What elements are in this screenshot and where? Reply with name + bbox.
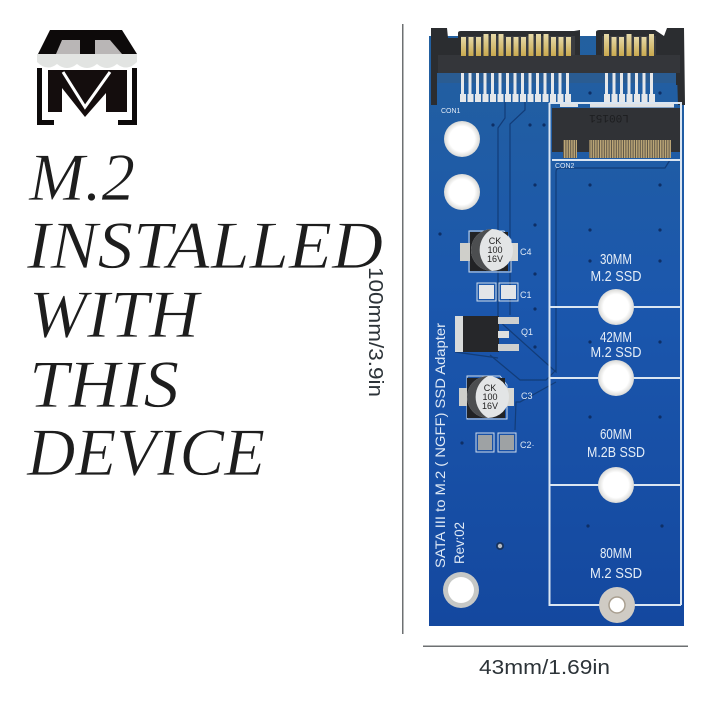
pads C2 xyxy=(476,433,516,452)
traces xyxy=(455,102,670,430)
board body xyxy=(429,36,684,626)
board labels: 80MM xyxy=(600,545,632,562)
title text: WITH xyxy=(29,276,203,352)
capacitor C3 xyxy=(459,376,514,419)
pads C1 xyxy=(477,283,518,301)
capacitor C4: 16V xyxy=(487,254,503,264)
board labels: 30MM xyxy=(600,251,632,268)
capacitor C4 xyxy=(460,229,518,272)
board labels: C2· xyxy=(520,440,535,450)
board labels: Rev:02 xyxy=(451,522,467,564)
board labels: CON2 xyxy=(555,163,575,170)
title text: DEVICE xyxy=(26,414,265,490)
board labels: 42MM xyxy=(600,329,632,346)
board labels: CON1 xyxy=(441,108,461,115)
board labels: M.2 SSD xyxy=(590,344,642,361)
transistor Q1 xyxy=(455,316,519,352)
height dimension line xyxy=(402,24,404,634)
capacitor C3: 16V xyxy=(482,401,498,411)
SATA solder pins xyxy=(460,73,655,102)
title text: M.2 xyxy=(28,139,135,215)
board labels: M.2B SSD xyxy=(587,444,645,461)
width dimension line xyxy=(423,646,688,647)
circuit board xyxy=(429,28,685,626)
width dimension label: 43mm/1.69in xyxy=(479,657,610,679)
board labels: SATA III to M.2 ( NGFF) SSD Adapter xyxy=(432,323,448,568)
M.2 socket: L00151 xyxy=(589,111,629,123)
board labels: C4 xyxy=(520,247,532,257)
board labels xyxy=(432,108,645,582)
M.2 socket xyxy=(552,104,681,158)
gold fingers xyxy=(461,34,654,56)
title text xyxy=(26,139,383,490)
capacitor C4: 100 xyxy=(487,245,503,255)
board labels: M.2 SSD xyxy=(590,565,642,582)
board labels: C3 xyxy=(521,391,533,401)
mounting holes xyxy=(443,121,635,623)
title text: INSTALLED xyxy=(26,207,383,283)
SATA connector xyxy=(431,28,685,105)
board labels: C1 xyxy=(520,290,532,300)
capacitor C3: 100 xyxy=(482,392,498,402)
title text: THIS xyxy=(29,346,179,422)
height dimension label: 100mm/3.9in xyxy=(364,267,386,397)
silkscreen partitions xyxy=(550,103,681,605)
logo: storefront M xyxy=(37,30,137,125)
capacitor C4: CK xyxy=(489,236,501,246)
vias xyxy=(438,91,664,528)
board labels: 60MM xyxy=(600,426,632,443)
board labels: M.2 SSD xyxy=(590,268,642,285)
board labels: Q1 xyxy=(521,327,533,337)
capacitor C3: CK xyxy=(484,383,496,393)
